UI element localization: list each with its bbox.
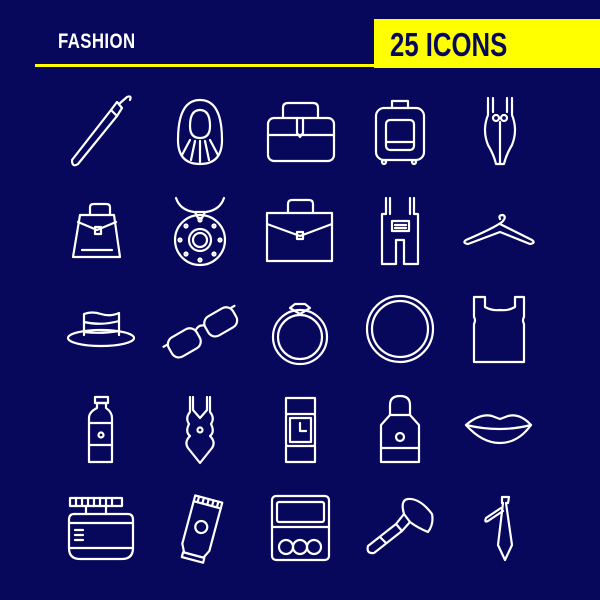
header underline bbox=[35, 64, 375, 67]
icon: bottle bbox=[89, 397, 112, 462]
icon: hat bbox=[68, 312, 134, 346]
icon: briefcase bbox=[267, 200, 332, 261]
icon: tube bbox=[179, 495, 222, 563]
icon: swimsuit bbox=[485, 98, 515, 164]
icon: tank top bbox=[474, 297, 524, 362]
icon: lips bbox=[466, 415, 531, 443]
icon: cream jar bbox=[69, 498, 133, 559]
icon: luggage bbox=[376, 101, 424, 164]
icon: cosmetic bottle bbox=[381, 396, 419, 462]
icon: makeup brush bbox=[368, 499, 432, 553]
icon: tie bbox=[485, 497, 512, 560]
icon: watch bbox=[286, 398, 315, 462]
icon: hanger bbox=[464, 215, 534, 244]
badge: 25 icons bbox=[374, 19, 600, 68]
icon: ring bbox=[273, 304, 327, 364]
icon: bag bbox=[268, 103, 334, 161]
icon: swimsuit 2 bbox=[186, 397, 214, 463]
icon: overalls bbox=[382, 198, 418, 264]
icon: bangle bbox=[367, 296, 433, 362]
icon: handbag bbox=[73, 204, 120, 257]
icon: umbrella bbox=[72, 96, 131, 165]
icon: sunglasses bbox=[161, 302, 244, 362]
title: FASHION bbox=[58, 30, 135, 53]
icon: scarf bbox=[178, 100, 222, 164]
icon: eyeshadow palette bbox=[272, 496, 329, 560]
icon: necklace pendant bbox=[175, 198, 225, 265]
badge: 25 icons: 25 ICONS bbox=[390, 26, 507, 63]
